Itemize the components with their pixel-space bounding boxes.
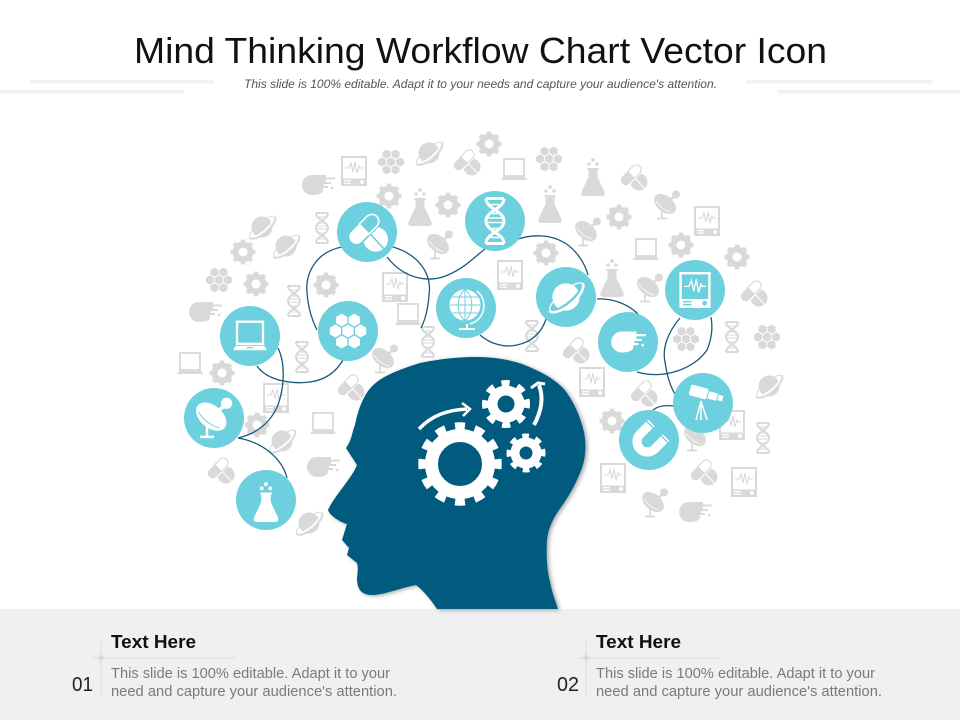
icon: pill [738, 278, 768, 306]
icon: dna [288, 286, 300, 316]
icon: laptop [395, 304, 421, 325]
icon: honeycomb [673, 327, 699, 351]
icon: dna [316, 213, 328, 243]
body text: need and capture your audience's attention. [596, 684, 882, 700]
icon: dna [296, 342, 308, 372]
icon: pill [618, 162, 648, 190]
icon: dish [650, 190, 680, 218]
number: 02 [557, 674, 579, 696]
icon: planet [410, 134, 448, 172]
circle: telescope [673, 373, 733, 433]
icon: pill [205, 455, 234, 484]
icon: monitor [600, 463, 626, 493]
connector lines [238, 236, 712, 478]
icon: dna [422, 327, 434, 357]
icon: flask [408, 188, 432, 226]
icon: monitor [263, 383, 289, 413]
heading: Text Here [111, 631, 196, 652]
icon: planet [243, 208, 281, 246]
icon: planet [263, 422, 301, 460]
arrow: curved up [531, 383, 545, 425]
top rules [0, 80, 960, 94]
icon: monitor [579, 367, 605, 397]
icon: monitor [731, 467, 757, 497]
marker [581, 653, 591, 663]
number: 01 [72, 674, 93, 696]
icon: gear [378, 186, 400, 206]
icon: dna [757, 423, 769, 453]
icon: monitor [719, 410, 745, 440]
circle: monitor [665, 260, 725, 320]
footer block 02 [557, 631, 882, 700]
body text [111, 666, 397, 700]
heading: Text Here [596, 631, 681, 652]
icon: medium gear [485, 383, 527, 425]
icon: large gear [422, 426, 498, 502]
icon: flask [538, 185, 562, 223]
icon: gear [670, 234, 692, 256]
icon: flask [581, 158, 605, 196]
circle: hand [598, 312, 658, 372]
circle: pill [337, 202, 397, 262]
icon: laptop [177, 353, 203, 374]
icon: gear [246, 414, 268, 436]
icon: flask [600, 259, 624, 297]
icon: honeycomb [378, 150, 404, 174]
icon: laptop [633, 239, 659, 260]
footer block 01 [72, 631, 397, 700]
icon: hand [302, 175, 335, 195]
circle: honeycomb [318, 301, 378, 361]
circle: dna [465, 191, 525, 251]
icon: honeycomb [206, 268, 232, 292]
icon: gear [212, 362, 232, 384]
icon: pill [451, 147, 480, 176]
icon: monitor [694, 206, 720, 236]
circle: planet [536, 267, 596, 327]
icon: gear [536, 242, 556, 264]
circle: laptop [220, 306, 280, 366]
icon: planet [750, 367, 788, 405]
body text [596, 666, 882, 700]
teal circles with icons [184, 191, 733, 530]
icon: hand [189, 302, 222, 322]
icon: pill [560, 335, 590, 364]
icon: dna [526, 321, 538, 351]
circle: magnet [619, 410, 679, 470]
icon: dish [368, 344, 398, 372]
icon: hand [307, 457, 340, 477]
gray background icons [177, 134, 788, 542]
icon: laptop [501, 159, 527, 180]
icon: gear [602, 410, 622, 432]
icon: planet [267, 227, 305, 265]
circle: flask [236, 470, 296, 530]
icon: monitor [497, 260, 523, 290]
icon: dish [423, 230, 453, 258]
title: Mind Thinking Workflow Chart Vector Icon [134, 30, 827, 71]
marker [96, 653, 106, 663]
icon: honeycomb [536, 147, 562, 171]
icon: dish [638, 488, 668, 516]
icon: gear [478, 134, 500, 154]
subtitle: This slide is 100% editable. Adapt it to your needs and capture your audience's attention. [244, 77, 717, 91]
icon: gear [438, 194, 458, 216]
icon: monitor [341, 156, 367, 186]
icon: dish [680, 422, 710, 450]
icon: planet [290, 504, 328, 542]
icon: gear [246, 274, 266, 294]
body text: This slide is 100% editable. Adapt it to your [596, 666, 875, 682]
icon: gear [232, 242, 254, 262]
icon: hand [679, 502, 712, 522]
icon: gear [608, 206, 630, 228]
icon: monitor [382, 272, 408, 302]
icon: dish [571, 217, 601, 246]
icon: pill [628, 378, 658, 406]
footer band [0, 609, 960, 720]
icon: pill [335, 372, 364, 400]
circle: satellite dish [184, 388, 244, 448]
icon: dna [726, 322, 738, 352]
icon: dish [633, 273, 663, 302]
icon: gear [316, 274, 336, 296]
icon: gear [726, 246, 748, 268]
head silhouette [328, 357, 585, 609]
body text: need and capture your audience's attention. [111, 684, 397, 700]
arrow: curved right [419, 403, 470, 429]
circle: globe [436, 278, 496, 338]
icon: pill [688, 457, 718, 486]
icon: laptop [310, 413, 336, 434]
icon: honeycomb [754, 325, 780, 349]
body text: This slide is 100% editable. Adapt it to your [111, 666, 390, 682]
icon: small gear [509, 436, 543, 470]
